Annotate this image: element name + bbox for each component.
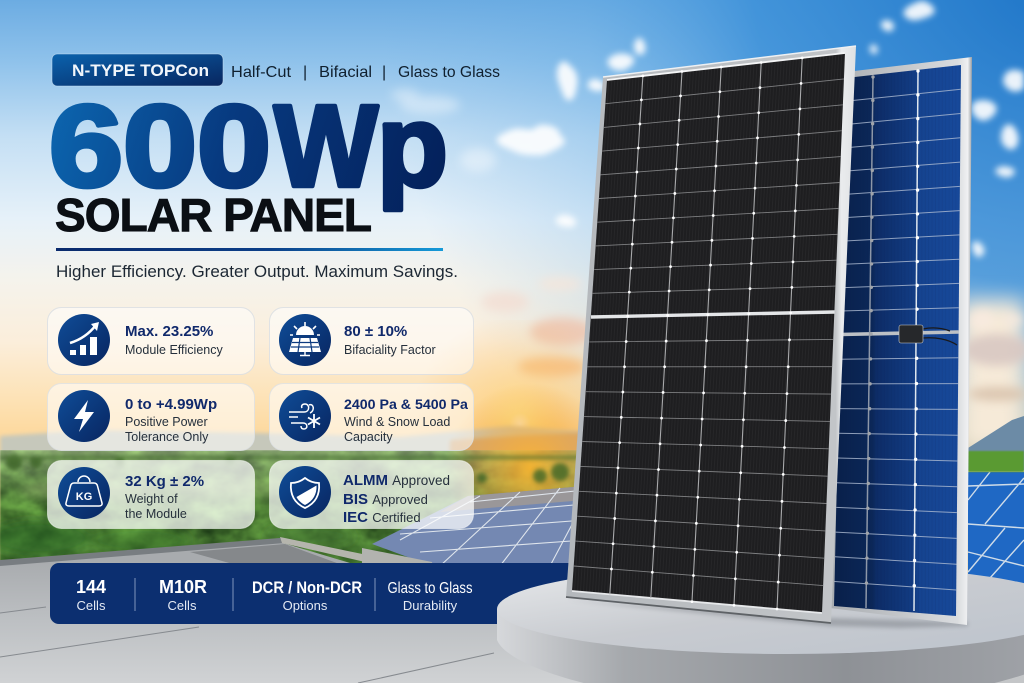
junction box: [899, 325, 957, 345]
headline: 600Wp: p: [377, 81, 448, 211]
card: bifaciality factor: 80 ± 10%: [344, 323, 407, 340]
card: wind and snow load: [270, 384, 474, 450]
icon: wind and snowflake: [279, 390, 331, 442]
headline: 600Wp: 600: [49, 81, 271, 211]
distant hills: [0, 426, 590, 470]
icon: lightning bolt: [58, 390, 110, 442]
icon: sun over solar panel: [279, 314, 331, 366]
icon: shield: [279, 466, 331, 518]
icon: KG weight: [58, 467, 110, 519]
spec strip: cells, size, options, durability: M10R: [159, 577, 207, 597]
tree band: [0, 450, 600, 566]
card: bifaciality factor: [270, 308, 474, 374]
card: module efficiency: Max. 23.25%: [125, 323, 213, 340]
icon: KG weight: KG: [76, 491, 92, 503]
spec strip: cells, size, options, durability: Options: [283, 598, 328, 613]
spec strip: cells, size, options, durability: DCR / Non-DCR: [252, 578, 362, 597]
spec strip: cells, size, options, durability: Glass to Glass: [388, 580, 472, 597]
subheading: SOLAR PANEL: SOLAR PANEL: [55, 189, 372, 241]
roof: [0, 542, 600, 683]
top tag: N-TYPE TOPCon chip: N-TYPE TOPCon: [72, 61, 209, 80]
feature list: Half-Cut, Bifacial, Glass to Glass: [231, 64, 500, 81]
card: module weight: [48, 460, 254, 528]
spec strip: cells, size, options, durability: [76, 577, 472, 613]
spec strip: cells, size, options, durability: Cells: [168, 598, 197, 613]
card: module efficiency: [48, 308, 254, 374]
card: certifications: ALMM Approved: [343, 472, 450, 489]
card: module efficiency: Module Efficiency: [125, 343, 223, 357]
spec strip: cells, size, options, durability: Cells: [77, 598, 106, 613]
feature list: Half-Cut, Bifacial, Glass to Glass: |: [303, 64, 307, 81]
card: certifications: IEC Certified: [343, 509, 421, 526]
white clouds: [496, 1, 1024, 258]
pedestal: [497, 564, 1024, 683]
card: module weight: Weight of: [125, 492, 178, 506]
solar field right: [968, 472, 1024, 592]
card: power tolerance: Positive Power: [125, 415, 208, 429]
top tag: N-TYPE TOPCon chip: [52, 54, 223, 86]
spec strip: cells, size, options, durability: Durability: [403, 598, 458, 613]
feature list: Half-Cut, Bifacial, Glass to Glass: |: [382, 64, 386, 81]
front solar panel (black, half-cut): [566, 46, 856, 623]
card: power tolerance: 0 to +4.99Wp: [125, 396, 217, 413]
feature list: Half-Cut, Bifacial, Glass to Glass: Bifacial: [319, 64, 372, 81]
card: bifaciality factor: Bifaciality Factor: [344, 343, 436, 357]
icon: rising bar chart: [58, 314, 110, 366]
blue rule: [56, 248, 443, 251]
spec strip background: [50, 563, 610, 624]
back solar panel (rear side, blue): [830, 57, 972, 625]
card: wind and snow load: Wind & Snow Load: [344, 415, 450, 429]
solar field centre: [372, 486, 585, 566]
spec strip: cells, size, options, durability: 144: [76, 577, 106, 597]
card: power tolerance: Tolerance Only: [125, 430, 209, 444]
card: wind and snow load: Capacity: [344, 430, 393, 444]
feature list: Half-Cut, Bifacial, Glass to Glass: Glass to Glass: [398, 64, 500, 81]
feature list: Half-Cut, Bifacial, Glass to Glass: Half-Cut: [231, 64, 292, 81]
tagline: Higher Efficiency. Greater Output. Maximum Savings.: [56, 262, 458, 281]
card: certifications: BIS Approved: [343, 491, 428, 508]
card: module weight: the Module: [125, 507, 187, 521]
headline: 600Wp: W: [274, 81, 378, 211]
card: power tolerance: [48, 384, 254, 450]
card: module weight: 32 Kg ± 2%: [125, 473, 204, 490]
card: certifications: [270, 460, 474, 528]
card: wind and snow load: 2400 Pa & 5400 Pa: [344, 397, 468, 413]
peach clouds: [481, 277, 1024, 401]
